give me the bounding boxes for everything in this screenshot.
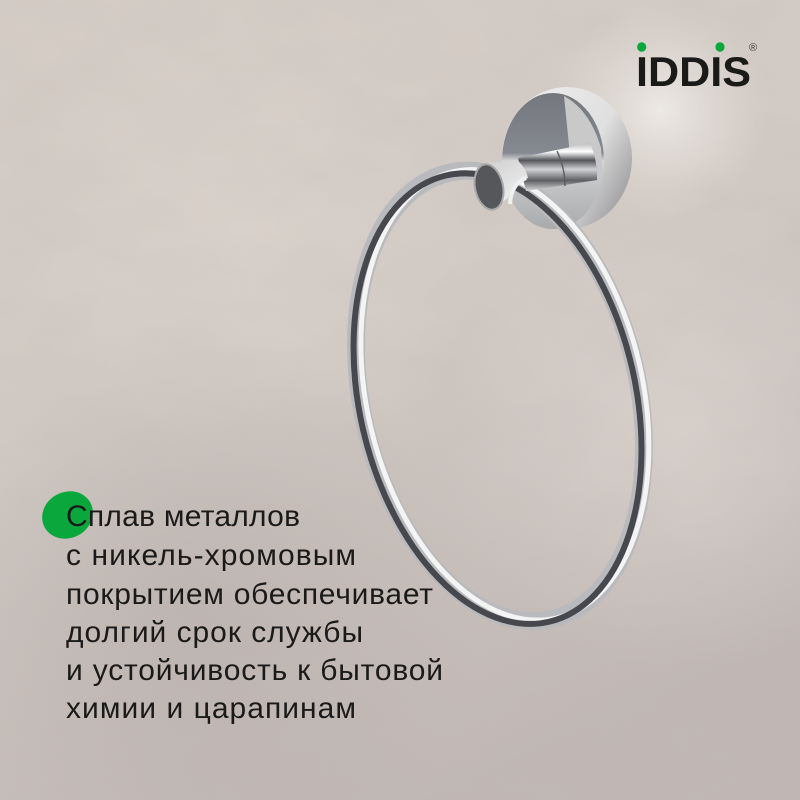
logo green dot left [637,42,646,52]
white gasket [510,178,526,204]
wall mount disc [502,87,632,229]
logo registered mark: ® [749,42,757,54]
callout accent: green blob [34,482,101,548]
callout text: и устойчивость к бытовой [66,654,443,687]
disc face reflection [564,96,603,175]
callout text: с никель-хромовым [66,539,356,572]
callout text: долгий срок службы [66,616,363,649]
post cylinder [518,143,597,191]
ring tube highlight [319,141,691,649]
ring tube base [314,142,686,650]
callout text: химии и царапинам [66,692,356,725]
post groove [557,151,565,186]
logo wordmark: IDDIS [636,48,751,95]
disc rim [502,87,632,229]
logo: IDDIS [636,42,757,95]
logo green dot right [715,42,725,52]
towel ring [311,141,691,653]
callout text: покрытием обеспечивает [66,578,433,611]
mounting post [471,143,597,212]
callout text: Сплав металлов [66,500,300,533]
collar opening [471,162,507,212]
ring tube dark reflection [312,144,684,653]
callout text [66,500,443,725]
ring collar [487,160,528,210]
disc face [502,93,604,229]
